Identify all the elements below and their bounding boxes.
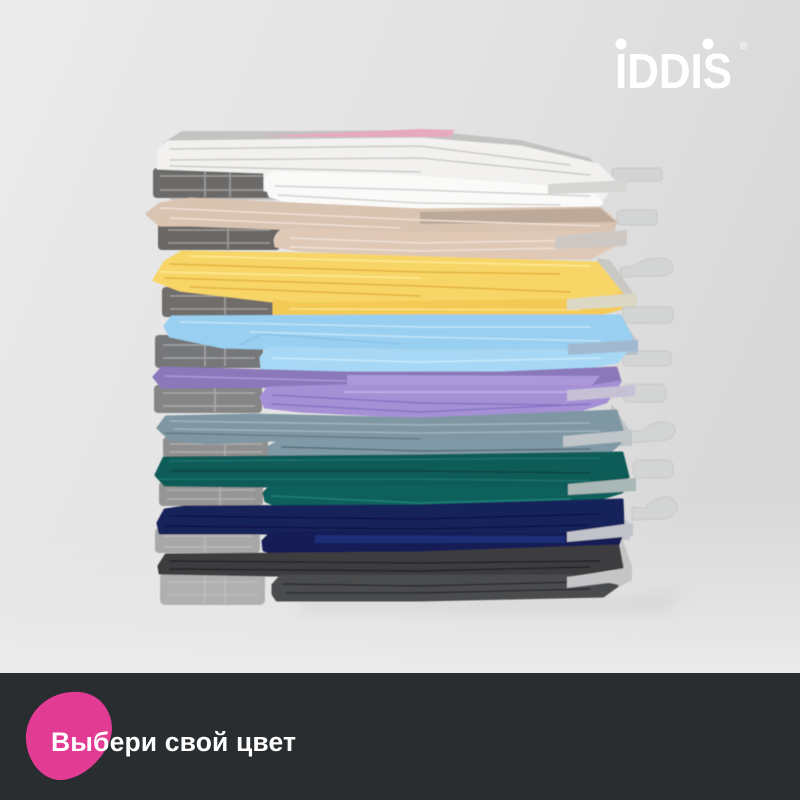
clear hanger block xyxy=(162,287,275,317)
upper fold xyxy=(158,139,615,202)
layer: dark teal curtain xyxy=(156,453,673,508)
clear hanger block xyxy=(155,335,263,368)
clip xyxy=(567,568,632,588)
hook xyxy=(632,497,677,520)
bottom band xyxy=(0,673,800,800)
upper fold xyxy=(154,368,620,390)
lower fold xyxy=(265,173,602,211)
layer: purple curtain xyxy=(154,368,666,417)
layer: yellow curtain xyxy=(154,252,673,317)
clip xyxy=(568,340,638,355)
hook xyxy=(633,460,673,478)
layer: charcoal curtain xyxy=(159,538,632,605)
clear hanger block xyxy=(160,573,265,605)
clip xyxy=(548,180,627,194)
caption: Выбери свой цвет xyxy=(51,727,296,757)
hook xyxy=(617,210,657,225)
clip xyxy=(567,385,635,401)
clip xyxy=(568,478,636,495)
clip xyxy=(567,523,633,542)
product stack of folded curtains xyxy=(147,129,677,605)
clear hanger block xyxy=(159,482,263,506)
hook xyxy=(623,351,671,366)
upper fold xyxy=(158,411,622,443)
stack shadow xyxy=(300,590,690,612)
layer: white curtain xyxy=(153,129,662,211)
packaging edge xyxy=(597,258,637,310)
clear hanger block xyxy=(163,437,268,458)
lower fold xyxy=(273,576,617,600)
layer: beige curtain xyxy=(147,199,657,258)
packaging edge xyxy=(600,498,630,540)
hook xyxy=(620,258,673,277)
clip xyxy=(567,293,637,310)
lower fold xyxy=(263,533,621,554)
lower fold xyxy=(274,294,622,316)
lower fold xyxy=(261,382,620,417)
upper fold xyxy=(158,500,623,535)
logo: IDDIS: IDDIS xyxy=(615,45,732,99)
hook xyxy=(630,422,675,443)
upper fold xyxy=(165,316,631,350)
lower fold xyxy=(269,440,620,457)
clear hanger block xyxy=(154,385,262,413)
hook xyxy=(623,307,673,323)
clear hanger block xyxy=(158,223,280,250)
layer: slate grey curtain xyxy=(158,404,675,458)
upper fold xyxy=(159,546,622,576)
clear hanger block xyxy=(153,168,285,198)
upper fold xyxy=(154,252,622,303)
packaging back xyxy=(163,130,610,200)
hook xyxy=(623,384,666,402)
lower fold xyxy=(261,348,627,372)
pink blob xyxy=(26,692,112,780)
logo: IDDIS: ® xyxy=(740,41,748,52)
packaging edge xyxy=(610,538,632,592)
clip xyxy=(555,230,627,249)
lower fold xyxy=(264,486,622,508)
layer: navy curtain xyxy=(155,497,677,554)
clear hanger block xyxy=(155,528,260,553)
layer: light blue curtain xyxy=(155,307,673,372)
upper fold xyxy=(147,199,616,232)
hook xyxy=(612,168,662,181)
lower fold xyxy=(275,229,613,258)
packaging edge xyxy=(600,404,632,446)
clip xyxy=(563,430,632,447)
packaging edge xyxy=(600,315,638,355)
upper fold xyxy=(156,453,628,488)
